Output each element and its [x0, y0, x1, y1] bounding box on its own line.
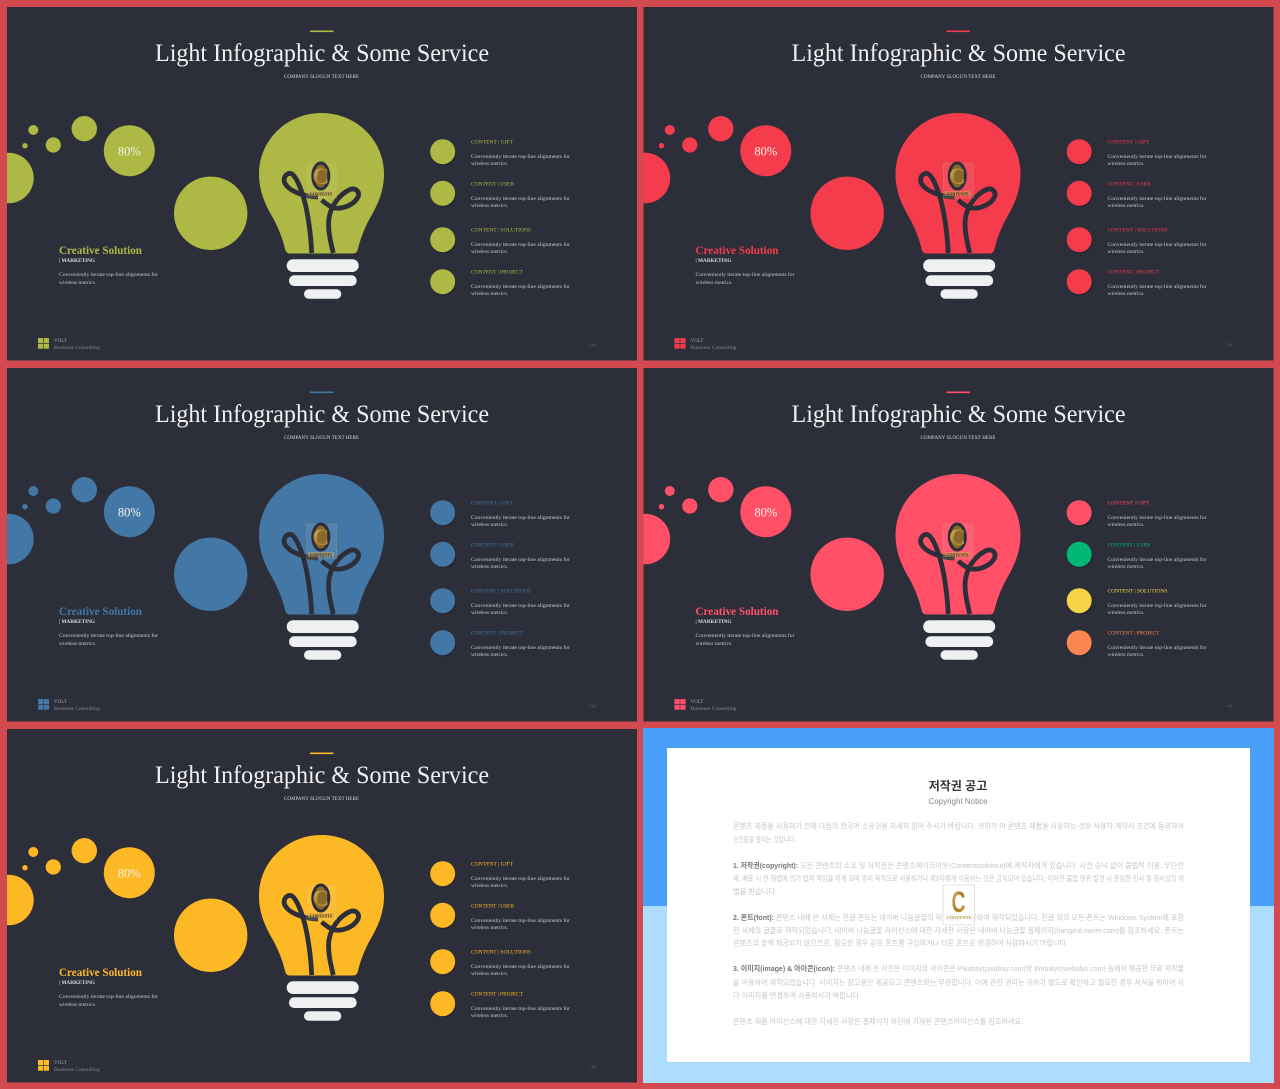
creative solution text block: Conveniently iterate top-line alignments for [696, 632, 795, 639]
subtitle: COMPANY SLOGUN TEXT HERE [284, 797, 359, 802]
footer brand: Business Consulting [54, 345, 100, 351]
creative solution text block: Creative Solution [59, 606, 143, 618]
watermark logo: C [949, 164, 966, 189]
footer brand [38, 338, 100, 351]
list item: gift [430, 500, 570, 528]
subtitle: COMPANY SLOGUN TEXT HERE [284, 75, 359, 80]
image and icon paragraph: 다 이미지를 변경하여 사용하시기 바랍니다. [733, 990, 861, 1000]
list item: solutions: Conveniently iterate top-line alignments for [1108, 241, 1207, 248]
creative solution text block: Conveniently iterate top-line alignments for [696, 271, 795, 278]
creative solution text block: | MARKETING [696, 620, 732, 625]
page number: // 01 [589, 342, 596, 348]
watermark logo: CONTENTS [946, 192, 969, 196]
image and icon paragraph: 콘텐츠 내에 쓴 사진은 이미지와 아이콘은 Pixabay(pixabay.com)와 Webalys(webalys.com) 등에서 제공한 무료 저작물 [837, 963, 1184, 973]
list item: gift: wireless metrics. [471, 883, 508, 889]
watermark logo: C [312, 886, 329, 911]
subtitle: COMPANY SLOGUN TEXT HERE [920, 75, 996, 80]
footer brand: VOLT [690, 339, 703, 344]
watermark logo: CONTENTS [946, 915, 972, 920]
light bulb icon [259, 835, 384, 1021]
list item: solutions [430, 949, 570, 977]
light bulb icon [896, 474, 1020, 660]
watermark logo: C [312, 525, 329, 550]
creative solution text block: | MARKETING [59, 259, 95, 264]
list item: user: Conveniently iterate top-line alignments for [471, 917, 570, 924]
title: Light Infographic & Some Service [155, 760, 489, 789]
copyright paragraph: 모든 콘텐츠의 소유 및 저작권은 콘텐츠메이크아웃(Contentstokeout)에 제작자에게 있습니다. 사전 승낙 없이 불법적 이용, 무단전 [800, 860, 1184, 870]
intro paragraph [733, 820, 1184, 844]
notice subheading: Copyright Notice [928, 797, 988, 806]
page number: // 01 [1226, 342, 1233, 348]
list item: user: wireless metrics. [471, 925, 508, 931]
list item: gift: Conveniently iterate top-line alignments for [471, 875, 570, 882]
font paragraph [733, 912, 1184, 948]
notice heading: 저작권 공고 [929, 778, 987, 793]
watermark logo: CONTENTS [946, 552, 969, 558]
copyright paragraph: 1. 저작권(copyright): [733, 860, 798, 870]
list item: solutions: wireless metrics. [471, 249, 508, 255]
panel: pink multicolor bulb infographic [620, 368, 1274, 722]
license closing line: 콘텐츠 제품 라이선스에 대한 자세한 사항은 홈페이지 하단에 기재된 콘텐츠라이선스를 참조하세요. [733, 1016, 1023, 1026]
list item: project: CONTENT | PROJECT [1108, 632, 1160, 636]
list item: solutions: wireless metrics. [471, 971, 508, 977]
list item: solutions [1067, 588, 1207, 616]
list item: gift: CONTENT | GIFT [471, 140, 513, 146]
list item: user: Conveniently iterate top-line alignments for [1108, 556, 1207, 563]
title: Light Infographic & Some Service [792, 399, 1126, 428]
decorative bubbles [620, 477, 884, 611]
list item: project [430, 991, 570, 1019]
list item: user: CONTENT | USER [1108, 182, 1151, 188]
page number: // 01 [589, 704, 596, 708]
copyright paragraph: 벌을 받습니다. [733, 886, 777, 896]
list item: gift: wireless metrics. [471, 161, 508, 167]
creative solution text block [59, 606, 158, 647]
list item: user [430, 903, 570, 931]
copyright paragraph [733, 860, 1184, 896]
watermark logo [943, 524, 973, 559]
creative solution text block: | MARKETING [696, 259, 732, 264]
list item: gift [430, 139, 570, 167]
image and icon paragraph [733, 963, 1184, 1000]
creative solution text block: wireless metrics. [59, 641, 96, 647]
list item: solutions: CONTENT | SOLUTIONS [471, 228, 531, 234]
percentage label: 80% [118, 506, 141, 520]
footer brand: VOLT [54, 1061, 67, 1066]
list item: gift [430, 861, 570, 889]
creative solution text block: Creative Solution [59, 245, 143, 257]
percentage label: 80% [118, 866, 141, 880]
panel: olive bulb infographic [0, 7, 637, 360]
list item: user: CONTENT | USER [471, 182, 515, 188]
list item: project: Conveniently iterate top-line alignments for [1108, 644, 1207, 651]
copyright paragraph: 재, 배포 시 민 형법에 의거 법적 책임을 지게 되며 영리 목적으로 이용하거나 제3자에게 이용하는 것은 금지되어 있습니다. 이러한 불법 행위 발견 시 준엄한 민사 및 형사상의 처 [733, 873, 1184, 883]
footer brand [674, 338, 737, 351]
watermark logo [943, 163, 973, 198]
intro paragraph: 콘텐츠 제품을 사용하기 전에 다음의 한국어 소유권을 자세히 읽어 주시기 바랍니다. 귀하가 이 콘텐츠 제품을 사용하는 것은 사용자 계약서 조건에 동의하여 [733, 820, 1184, 830]
list item: solutions: wireless metrics. [1108, 249, 1144, 255]
creative solution text block: Creative Solution [59, 967, 143, 979]
percentage label: 80% [754, 144, 777, 158]
list item: project: wireless metrics. [471, 652, 508, 658]
decorative bubbles [620, 116, 884, 250]
list item: project: wireless metrics. [1108, 291, 1144, 297]
percentage label: 80% [118, 144, 141, 158]
creative solution text block: | MARKETING [59, 620, 95, 625]
decorative bubbles [0, 477, 247, 611]
list item: gift [1067, 500, 1207, 528]
list item: user: CONTENT | USER [471, 904, 515, 910]
footer brand: Business Consulting [54, 1067, 100, 1073]
footer brand: VOLT [54, 700, 67, 705]
list item: project [430, 630, 570, 658]
list item: gift: CONTENT | GIFT [1108, 502, 1150, 506]
creative solution text block: wireless metrics. [696, 641, 732, 647]
watermark logo: CONTENTS [310, 192, 333, 196]
intro paragraph: 승인함을 알리는 것입니다. [733, 834, 796, 844]
footer brand: VOLT [690, 700, 703, 705]
list item: user [430, 542, 570, 570]
panel: red bulb infographic [620, 7, 1274, 360]
list item: gift: Conveniently iterate top-line alignments for [471, 153, 570, 160]
creative solution text block: Creative Solution [696, 606, 779, 618]
list item: gift: Conveniently iterate top-line alignments for [1108, 153, 1207, 160]
accent line [310, 30, 334, 32]
page number: // 01 [589, 1064, 596, 1070]
creative solution text block: Conveniently iterate top-line alignments for [59, 632, 158, 639]
list item: project: Conveniently iterate top-line alignments for [1108, 283, 1207, 290]
list item: project: Conveniently iterate top-line alignments for [471, 283, 570, 290]
watermark logo: C [312, 164, 329, 189]
list item: project [1067, 630, 1207, 658]
page number: // 01 [1226, 704, 1233, 708]
list item: user [430, 181, 570, 209]
font paragraph: 2. 폰트(font): [733, 913, 774, 922]
list item: solutions [430, 588, 570, 616]
list item: solutions: Conveniently iterate top-line alignments for [471, 963, 570, 970]
list item: gift: CONTENT | GIFT [471, 502, 513, 506]
font paragraph: 콘텐츠의 함께 제공되지 않으므로, 필요한 경우 같은 폰트를 구입하거나 다른 폰트로 변경하여 사용하시기 바랍니다. [733, 938, 1068, 948]
list item: solutions: CONTENT | SOLUTIONS [1108, 590, 1168, 594]
list item: gift: CONTENT | GIFT [471, 862, 513, 868]
list item: user: wireless metrics. [471, 564, 508, 570]
decorative bubbles [0, 838, 247, 972]
creative solution text block: Conveniently iterate top-line alignments for [59, 993, 158, 1000]
watermark logo [307, 885, 337, 920]
list item: user: CONTENT | USER [1108, 544, 1151, 548]
list item: project: CONTENT | PROJECT [471, 992, 523, 998]
watermark logo: CONTENTS [310, 552, 333, 558]
list item: user [1067, 181, 1207, 209]
list item: project [430, 269, 570, 297]
list item: gift: Conveniently iterate top-line alignments for [471, 514, 570, 521]
footer brand: Business Consulting [54, 706, 100, 712]
panel: blue bulb infographic [0, 368, 637, 722]
list item: solutions: CONTENT | SOLUTIONS [471, 950, 531, 956]
accent line [946, 392, 970, 393]
footer brand: Business Consulting [690, 345, 737, 351]
footer brand [38, 699, 100, 712]
light bulb icon [896, 113, 1020, 299]
title: Light Infographic & Some Service [792, 38, 1126, 67]
list item: gift: wireless metrics. [1108, 161, 1144, 167]
creative solution text block: | MARKETING [59, 981, 95, 986]
accent line [310, 752, 334, 754]
list item: user: CONTENT | USER [471, 544, 515, 548]
list item: user: wireless metrics. [1108, 203, 1144, 209]
accent line [310, 392, 334, 393]
list item: user: wireless metrics. [1108, 564, 1144, 570]
creative solution text block: Conveniently iterate top-line alignments for [59, 271, 158, 278]
footer brand [38, 1060, 100, 1073]
panel: copyright notice [643, 728, 1274, 1083]
light bulb icon [259, 113, 384, 299]
list item: project: wireless metrics. [1108, 652, 1144, 658]
font paragraph: 콘텐츠 내에 쓴 서체는 한글 폰트는 네이버 나눔글꼴의 저작물을 이용하여 제작되었습니다. 한글 외의 모든 폰트는 Windows System에 포함 [776, 912, 1184, 922]
creative solution text block [696, 245, 795, 286]
title: Light Infographic & Some Service [155, 399, 489, 428]
list item: solutions: CONTENT | SOLUTIONS [471, 590, 531, 594]
watermark logo [943, 885, 974, 925]
creative solution text block: wireless metrics. [59, 280, 96, 286]
list item: solutions: Conveniently iterate top-line alignments for [471, 241, 570, 248]
creative solution text block [59, 245, 158, 286]
list item: project [1067, 269, 1207, 297]
watermark logo [307, 163, 337, 198]
panel: yellow bulb infographic [0, 729, 637, 1082]
watermark logo: C [952, 886, 966, 919]
list item: user: Conveniently iterate top-line alignments for [1108, 195, 1207, 202]
list item: gift: wireless metrics. [1108, 522, 1144, 528]
footer brand [674, 699, 737, 712]
list item: user: Conveniently iterate top-line alignments for [471, 195, 570, 202]
list item: solutions: wireless metrics. [1108, 610, 1144, 616]
creative solution text block: Creative Solution [696, 245, 779, 257]
footer brand: VOLT [54, 339, 67, 344]
list item: project: CONTENT | PROJECT [471, 270, 523, 276]
list item: solutions: wireless metrics. [471, 610, 508, 616]
watermark logo: C [949, 525, 966, 550]
list item: solutions [1067, 227, 1207, 255]
list item: gift [1067, 139, 1207, 167]
image and icon paragraph: 3. 이미지(image) & 아이콘(icon): [733, 963, 835, 973]
subtitle: COMPANY SLOGUN TEXT HERE [920, 436, 996, 441]
percentage label: 80% [754, 506, 777, 520]
creative solution text block [59, 967, 158, 1008]
subtitle: COMPANY SLOGUN TEXT HERE [284, 436, 359, 441]
creative solution text block [696, 606, 795, 647]
list item: project: wireless metrics. [471, 291, 508, 297]
footer brand: Business Consulting [690, 706, 737, 712]
list item: project: Conveniently iterate top-line alignments for [471, 1005, 570, 1012]
list item: gift: CONTENT | GIFT [1108, 140, 1150, 146]
list item: user: Conveniently iterate top-line alignments for [471, 556, 570, 563]
title: Light Infographic & Some Service [155, 38, 489, 67]
accent line [946, 30, 970, 32]
list item: project: Conveniently iterate top-line alignments for [471, 644, 570, 651]
list item: gift: Conveniently iterate top-line alignments for [1108, 514, 1207, 521]
creative solution text block: wireless metrics. [59, 1002, 96, 1008]
font paragraph: 된 서체의 글꼴로 제작되었습니다. 네이버 나눔글꼴 라이선스에 대한 자세한 사항은 네이버 나눔글꼴 홈페이지(hangeul.naver.com)를 참조하세요. 폰트는 [733, 925, 1184, 935]
decorative bubbles [0, 116, 247, 250]
creative solution text block: wireless metrics. [696, 280, 732, 286]
light bulb icon [259, 474, 384, 660]
list item: solutions [430, 227, 570, 255]
watermark logo: CONTENTS [310, 914, 333, 918]
list item: project: wireless metrics. [471, 1013, 508, 1019]
list item: solutions: Conveniently iterate top-line alignments for [1108, 602, 1207, 609]
image and icon paragraph: 을 이용하여 제작되었습니다. 이미지는 참고용만 제공되고 콘텐츠와는 무관합니다. 이에 관한 권리는 귀하가 별도로 확인하고 필요한 경우 서식을 위하여 서 [733, 977, 1184, 987]
list item: solutions: Conveniently iterate top-line alignments for [471, 602, 570, 609]
list item: gift: wireless metrics. [471, 522, 508, 528]
list item: project: CONTENT | PROJECT [1108, 270, 1160, 276]
list item: project: CONTENT | PROJECT [471, 632, 523, 636]
watermark logo [307, 524, 337, 559]
list item: user: wireless metrics. [471, 203, 508, 209]
list item: user [1067, 542, 1207, 570]
list item: solutions: CONTENT | SOLUTIONS [1108, 228, 1168, 234]
